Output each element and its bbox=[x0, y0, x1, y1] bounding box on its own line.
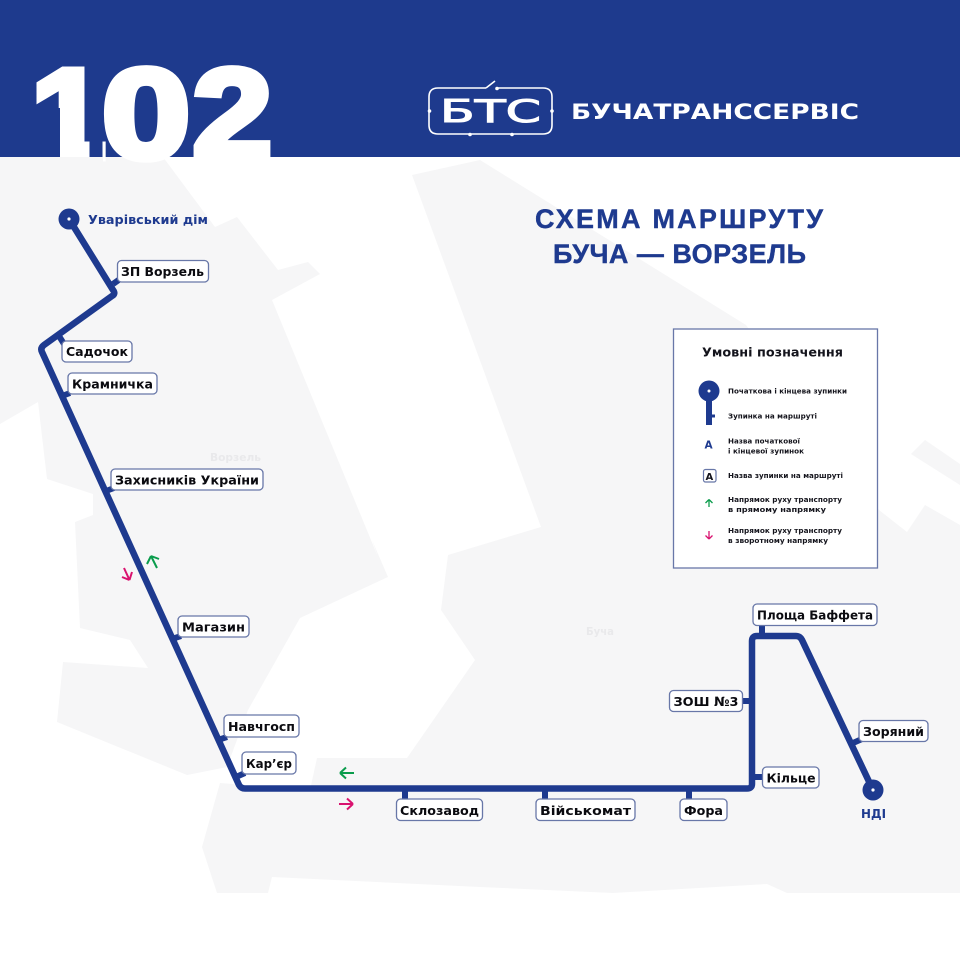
legend text: route stop: Зупинка на маршруті bbox=[728, 412, 817, 420]
stop: Кільце: Кільце bbox=[766, 772, 816, 786]
stop: Зоряний: Зоряний bbox=[863, 725, 924, 740]
map label: Ворзель: Ворзель bbox=[210, 452, 261, 464]
logo: БТС bbox=[440, 94, 541, 130]
route number: 2 bbox=[192, 42, 272, 185]
legend text: forward direction: в прямому напрямку bbox=[728, 505, 826, 514]
legend text: return direction: Напрямок руху транспорту bbox=[728, 526, 842, 535]
legend heading: Умовні позначення bbox=[702, 344, 843, 360]
stop: Склозавод: Склозавод bbox=[400, 804, 479, 819]
stop: Навчгосп bbox=[218, 715, 299, 740]
route number: 1 bbox=[31, 42, 106, 185]
stop: Військомат bbox=[536, 788, 635, 820]
legend text: return direction bbox=[728, 526, 842, 545]
stop: Площа Баффета: Площа Баффета bbox=[757, 608, 873, 624]
stop: Військомат: Військомат bbox=[540, 804, 632, 819]
title: СХЕМА МАРШРУТУ bbox=[535, 204, 824, 234]
stop: ЗОШ №3: ЗОШ №3 bbox=[674, 695, 738, 710]
legend text: forward direction: Напрямок руху транспорту bbox=[728, 495, 842, 504]
stop: Крамничка: Крамничка bbox=[72, 378, 153, 392]
terminal stop: Уварівський дім bbox=[58, 208, 208, 230]
route number bbox=[20, 42, 272, 186]
arrow: pink return on horizontal bbox=[339, 798, 353, 810]
terminal stop: НДІ bbox=[861, 780, 886, 822]
logo: БУЧАТРАНССЕРВІС bbox=[571, 100, 859, 125]
stop: Фора: Фора bbox=[684, 804, 723, 819]
background map bbox=[0, 157, 960, 893]
legend icon: terminal name: А bbox=[704, 440, 714, 452]
terminal stop: НДІ: НДІ bbox=[861, 807, 886, 822]
route line bbox=[41, 219, 873, 790]
legend icon: green arrow bbox=[706, 500, 712, 507]
stop: Фора bbox=[680, 788, 727, 820]
legend text: terminal stop: Початкова і кінцева зупинки bbox=[728, 386, 847, 396]
legend panel bbox=[674, 329, 878, 568]
terminal stop: Уварівський дім: Уварівський дім bbox=[88, 213, 208, 228]
stop: Навчгосп: Навчгосп bbox=[228, 720, 295, 735]
stop: Кар'єр: Кар’єр bbox=[246, 757, 292, 772]
stop: ЗП Ворзель bbox=[113, 260, 208, 284]
stop: Зоряний bbox=[853, 720, 928, 743]
legend icon: stop name bbox=[704, 470, 716, 483]
arrow: green forward on horizontal bbox=[340, 768, 354, 778]
stop: Кільце bbox=[752, 767, 819, 788]
stop: ЗП Ворзель: ЗП Ворзель bbox=[121, 265, 204, 280]
stop: Склозавод bbox=[396, 788, 482, 820]
title: БУЧА — ВОРЗЕЛЬ bbox=[553, 239, 806, 269]
route number: 0 bbox=[102, 42, 190, 186]
stop: Захисників України bbox=[106, 469, 263, 491]
stop: Захисників України: Захисників України bbox=[115, 474, 259, 488]
title bbox=[535, 204, 824, 269]
header band bbox=[0, 0, 960, 157]
logo bbox=[428, 81, 859, 136]
legend text: forward direction bbox=[728, 495, 842, 514]
legend icon: pink arrow bbox=[706, 531, 712, 539]
legend text: return direction: в зворотному напрямку bbox=[728, 536, 828, 545]
legend text: terminal name: і кінцевої зупинок bbox=[728, 446, 804, 456]
stop: Магазин bbox=[172, 616, 249, 639]
legend icon: terminal and route stop bbox=[698, 380, 720, 425]
stop: Кар'єр bbox=[236, 752, 296, 777]
legend text: terminal name bbox=[728, 436, 804, 456]
map label: Буча: Буча bbox=[586, 626, 614, 638]
legend text: stop name: Назва зупинки на маршруті bbox=[728, 471, 843, 480]
legend text: terminal name: Назва початкової bbox=[728, 436, 801, 446]
stop: Магазин: Магазин bbox=[182, 620, 245, 636]
arrow: pink return on diagonal bbox=[122, 568, 132, 580]
stop: Площа Баффета bbox=[753, 604, 877, 636]
legend icon: stop name: А bbox=[706, 472, 714, 483]
stop: Крамничка bbox=[62, 373, 157, 396]
stop: Садочок bbox=[59, 336, 132, 362]
stop: ЗОШ №3 bbox=[670, 690, 752, 712]
stop: Садочок: Садочок bbox=[66, 345, 128, 360]
arrow: green forward on diagonal bbox=[147, 556, 159, 568]
